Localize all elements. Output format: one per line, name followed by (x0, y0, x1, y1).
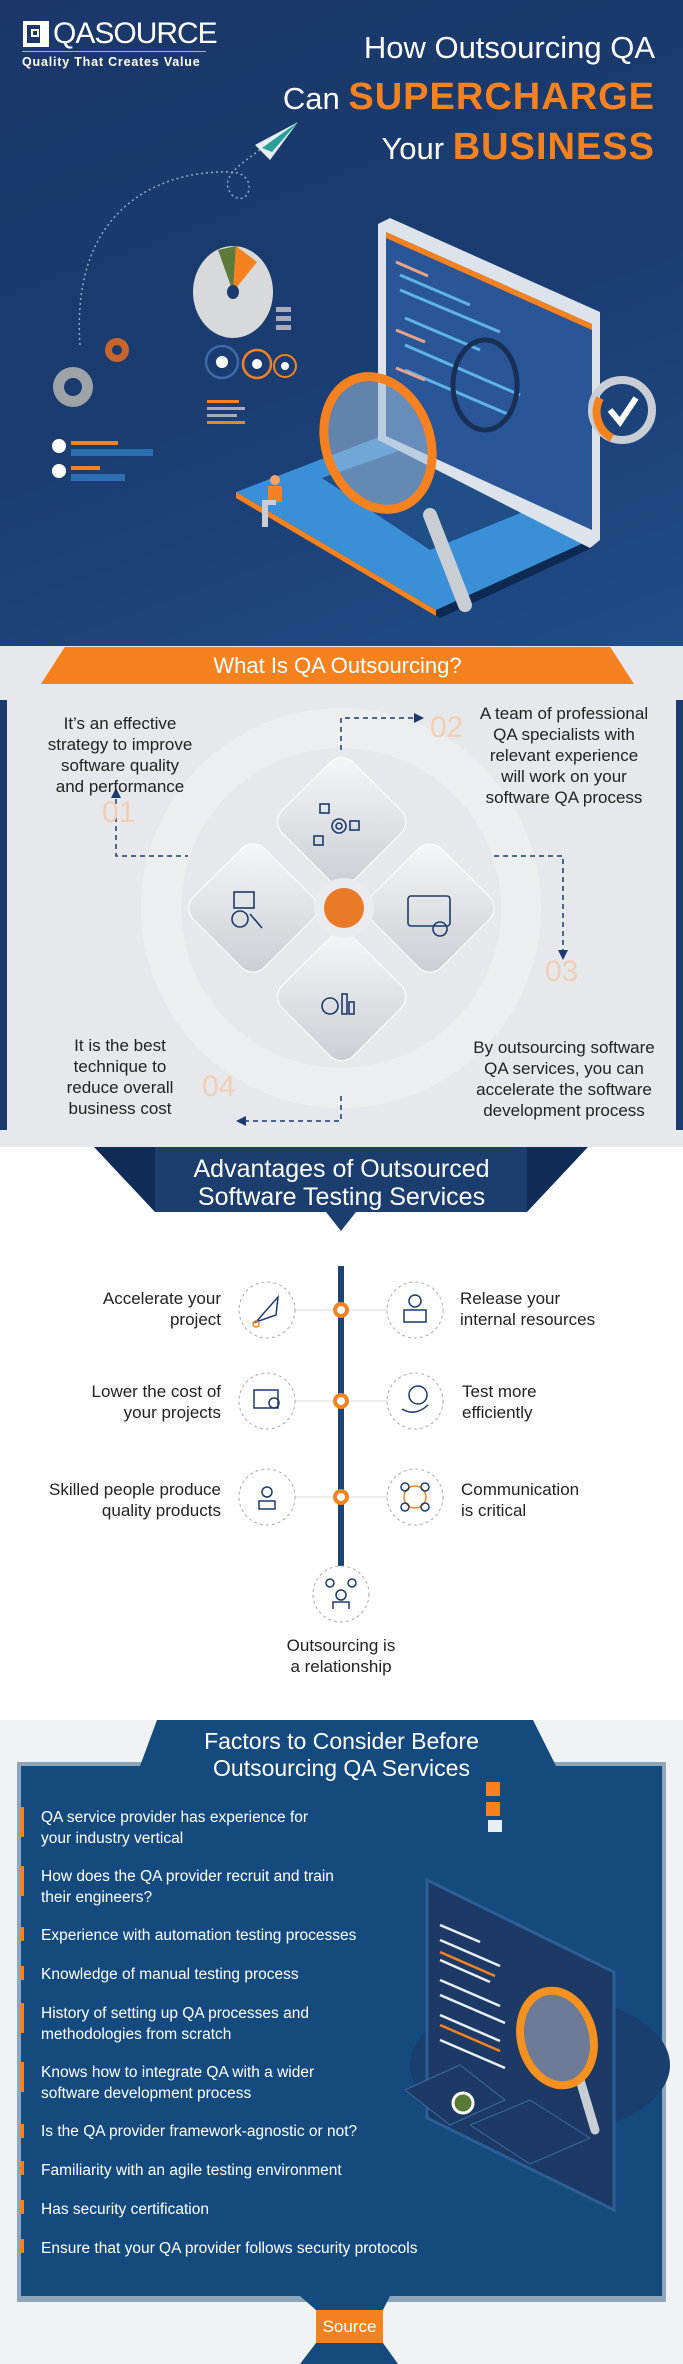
text 02: will work on your (501, 767, 627, 786)
text 01: software quality (61, 756, 179, 775)
factor list: Familiarity with an agile testing environment (41, 2162, 342, 2179)
illustration (405, 1782, 670, 2210)
factor list: Knowledge of manual testing process (41, 1966, 299, 1983)
magnifying glass (306, 361, 465, 605)
advantage: skilled: Skilled people produce (49, 1480, 221, 1499)
advantage: release: internal resources (460, 1310, 595, 1329)
hero section (0, 0, 683, 646)
heading banner: What Is QA Outsourcing? (213, 653, 462, 678)
advantage: accelerate (103, 1289, 221, 1329)
advantage: relationship (287, 1636, 395, 1676)
logo (22, 17, 217, 69)
advantage: accelerate: Accelerate your (103, 1289, 221, 1308)
source button (316, 2310, 383, 2343)
factor list: QA service provider has experience for (41, 1809, 308, 1826)
advantage: release (460, 1289, 595, 1329)
panel: advantages: Software Testing Services (198, 1183, 485, 1211)
text 02: relevant experience (490, 746, 638, 765)
hero illustration (52, 122, 656, 618)
text 04: It is the best (74, 1036, 166, 1055)
advantage: lower cost: your projects (124, 1403, 221, 1422)
timeline (238, 1266, 444, 1622)
numbers: 01 (102, 796, 135, 829)
advantage: lower cost: Lower the cost of (92, 1382, 221, 1401)
factor list: Is the QA provider framework-agnostic or not? (41, 2123, 357, 2140)
text 02: QA specialists with (493, 725, 635, 744)
factor list: methodologies from scratch (41, 2026, 231, 2042)
advantage: relationship: Outsourcing is (287, 1636, 395, 1655)
factor list: History of setting up QA processes and (41, 2005, 309, 2022)
advantage: communication: Communication (461, 1480, 579, 1499)
advantage: accelerate: project (170, 1310, 221, 1329)
factor list: Ensure that your QA provider follows security protocols (41, 2240, 417, 2257)
checklist (52, 439, 153, 481)
text 04: reduce overall (67, 1078, 173, 1097)
heading (94, 1147, 588, 1231)
text 03 (473, 1038, 655, 1120)
text 04 (67, 1036, 173, 1118)
heading banner (41, 647, 634, 684)
logo: Quality That Creates Value (22, 55, 200, 69)
advantage: lower cost (92, 1382, 221, 1422)
factor list: your industry vertical (41, 1830, 183, 1846)
laptop (236, 218, 652, 618)
title (283, 30, 655, 168)
text 02: software QA process (486, 788, 642, 807)
advantage: test: Test more (462, 1382, 537, 1401)
title: Can SUPERCHARGE (283, 76, 655, 118)
text 04: business cost (68, 1099, 172, 1118)
logo: QASOURCE (53, 17, 217, 50)
factor list: How does the QA provider recruit and train (41, 1868, 334, 1885)
advantage: relationship: a relationship (290, 1657, 392, 1676)
text 04: technique to (74, 1057, 166, 1076)
source button: Source (323, 2317, 376, 2336)
heading (204, 1728, 479, 1781)
text 03: QA services, you can (484, 1059, 644, 1078)
panel: advantages (0, 1147, 683, 1720)
factor list: software development process (41, 2084, 251, 2102)
text 03: development process (483, 1101, 645, 1120)
text 01: It’s an effective (64, 714, 176, 733)
panel: what is QA outsourcing: 02 (430, 711, 463, 744)
heading: Outsourcing QA Services (213, 1755, 470, 1781)
text 03: accelerate the software (476, 1080, 652, 1099)
advantage: test (462, 1382, 537, 1422)
text 01 (48, 714, 192, 796)
advantage: communication (461, 1480, 579, 1520)
panel: what is QA outsourcing: 03 (545, 955, 578, 988)
panel: what is QA outsourcing: 04 (202, 1070, 235, 1103)
text 03: By outsourcing software (473, 1038, 655, 1057)
pie chart (193, 246, 296, 424)
heading: Factors to Consider Before (204, 1728, 479, 1754)
panel: advantages: Advantages of Outsourced (193, 1155, 490, 1183)
text 01: and performance (56, 777, 184, 796)
title: How Outsourcing QA (364, 30, 655, 65)
text 02: A team of professional (480, 704, 648, 723)
factor list: Knows how to integrate QA with a wider (41, 2064, 314, 2081)
text 02 (480, 704, 648, 807)
factor list: Has security certification (41, 2201, 209, 2218)
advantage: skilled (49, 1480, 221, 1520)
factor list (41, 1809, 417, 2257)
advantage: test: efficiently (462, 1403, 533, 1422)
title: Your BUSINESS (381, 126, 655, 168)
factor list: Experience with automation testing processes (41, 1927, 356, 1944)
diamond diagram (111, 713, 568, 1126)
gears (53, 338, 129, 407)
orange bars (20, 1807, 24, 2253)
advantage: release: Release your (460, 1289, 560, 1308)
panel: factors (0, 1720, 683, 2364)
icons (232, 804, 450, 1014)
advantage: communication: is critical (461, 1501, 526, 1520)
factor list: their engineers? (41, 1888, 152, 1906)
text 01: strategy to improve (48, 735, 192, 754)
panel: what is QA outsourcing (0, 646, 683, 1147)
person (262, 475, 282, 527)
advantage: skilled: quality products (102, 1501, 221, 1520)
